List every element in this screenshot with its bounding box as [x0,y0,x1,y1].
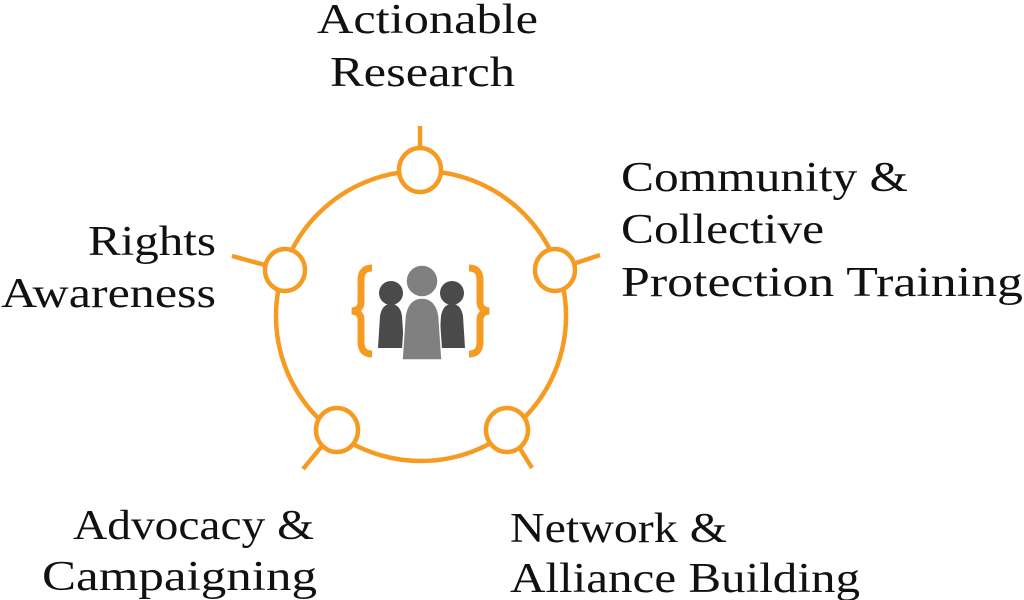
label: Community & Collective Protection Training: Community & [621,155,908,201]
label: Community & Collective Protection Training [621,155,1023,306]
label: Advocacy & Campaigning [42,503,317,600]
label: Network & Alliance Building [510,506,860,600]
label: Community & Collective Protection Training: Protection Training [621,260,1023,306]
icon: community people in braces [352,265,489,360]
label: Rights Awareness: Awareness [1,271,216,317]
label: Advocacy & Campaigning: Campaigning [42,554,317,600]
label: Rights Awareness [1,219,216,317]
label: Rights Awareness: Rights [88,219,216,265]
label: Network & Alliance Building: Network & [510,506,727,552]
main circle [276,171,566,461]
spokes [232,126,600,469]
nodes [265,148,575,452]
label: Advocacy & Campaigning: Advocacy & [73,503,314,549]
label: Actionable Research [317,0,538,96]
label: Actionable Research: Research [330,50,515,96]
label: Community & Collective Protection Training: Collective [621,207,824,253]
